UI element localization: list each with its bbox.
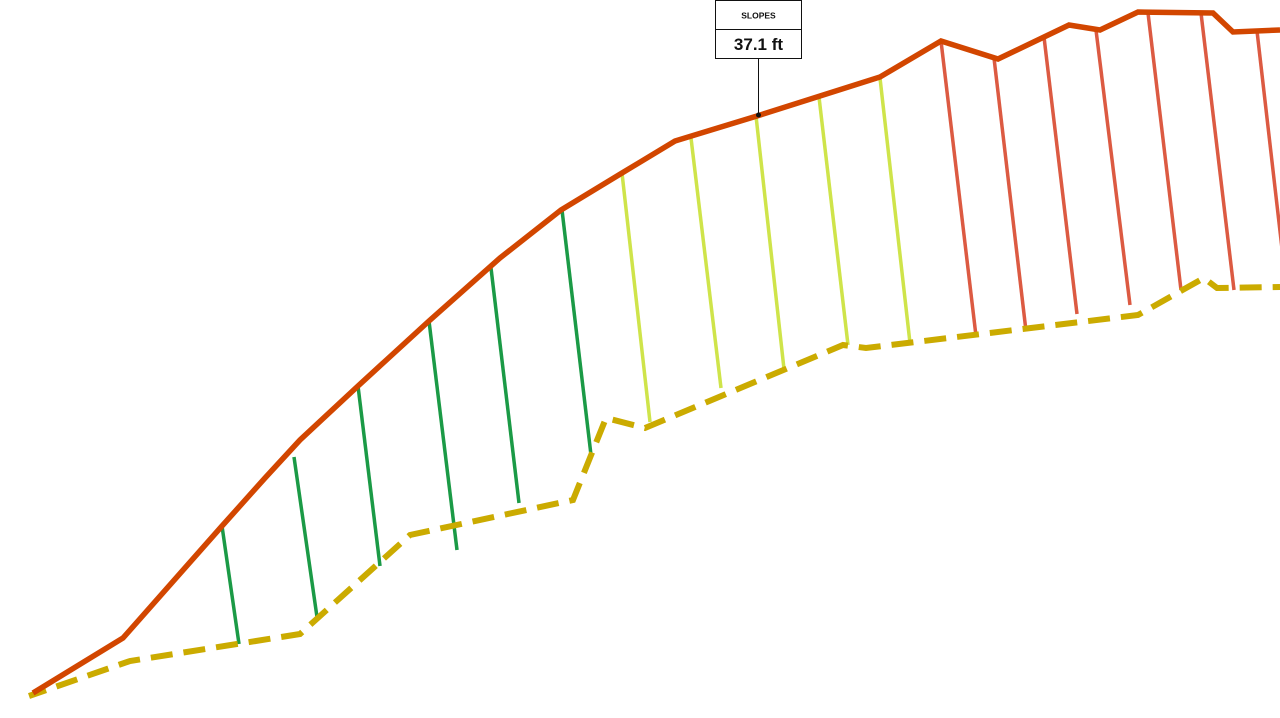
dashed gold lower profile line — [29, 278, 1280, 696]
lime slope measurement lines — [622, 78, 910, 422]
callout leader line — [758, 58, 760, 115]
callout: slopes value — [716, 0, 802, 118]
callout anchor dot — [756, 112, 761, 118]
red slope measurement lines — [941, 13, 1280, 336]
callout box — [716, 0, 802, 58]
callout value: 37.1 ft — [734, 35, 783, 54]
callout label: SLOPES — [741, 10, 776, 20]
green slope measurement lines — [222, 210, 591, 644]
